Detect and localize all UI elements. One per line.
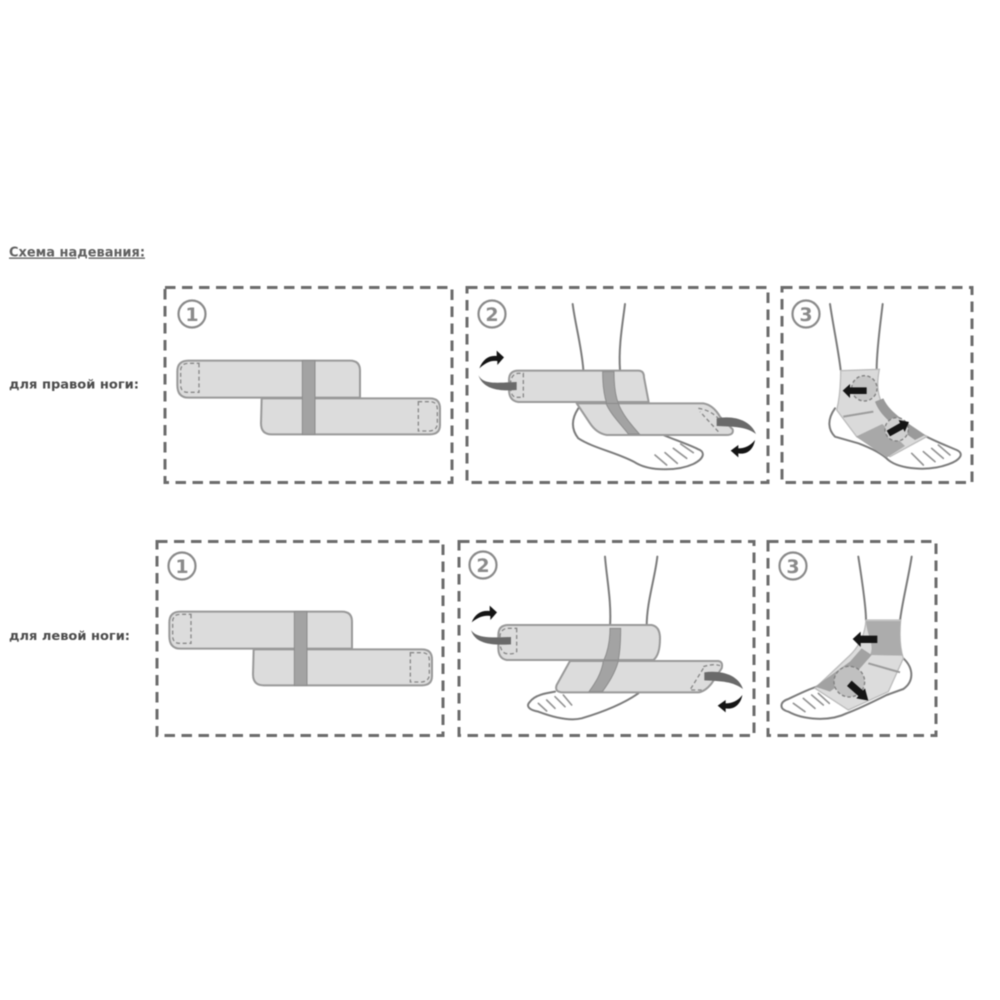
arrow: left <box>471 606 511 645</box>
arrow: pull right <box>887 420 909 436</box>
arrow: left <box>478 351 517 390</box>
panel: left foot step 1 <box>157 542 443 736</box>
flat strap <box>177 361 440 434</box>
number 3: 3 <box>786 556 800 578</box>
number 1 <box>178 300 206 328</box>
foot with brace <box>829 304 961 469</box>
number 2: 2 <box>485 304 499 326</box>
label: right foot: для правой ноги: <box>9 376 139 392</box>
panel: right foot step 3 <box>782 288 972 482</box>
number 3: 3 <box>799 304 813 326</box>
number 2: 2 <box>476 555 490 577</box>
flat strap <box>169 612 432 685</box>
arrow: right <box>717 417 756 457</box>
foot with brace <box>781 557 912 719</box>
leg, foot and wrapped strap <box>478 304 756 469</box>
panel: left foot step 2 <box>459 542 754 736</box>
number 3 <box>792 300 820 328</box>
number 3 <box>780 552 806 580</box>
panel: right foot step 1 <box>165 288 452 482</box>
number 1: 1 <box>185 304 199 326</box>
number 2 <box>478 300 506 328</box>
heading: putting-on scheme: Схема надевания: <box>9 246 145 260</box>
arrow: pull left <box>853 632 877 647</box>
panel: right foot step 2 <box>467 288 768 482</box>
label: left foot: для левой ноги: <box>9 628 130 643</box>
leg, foot and wrapped strap <box>471 557 743 719</box>
number 1 <box>168 552 196 580</box>
number 1: 1 <box>175 556 189 578</box>
arrow: right <box>704 672 743 712</box>
arrow: pull down-right <box>847 681 868 701</box>
number 2 <box>470 552 496 578</box>
panel: left foot step 3 <box>768 542 936 736</box>
arrow: pull left <box>843 384 867 398</box>
